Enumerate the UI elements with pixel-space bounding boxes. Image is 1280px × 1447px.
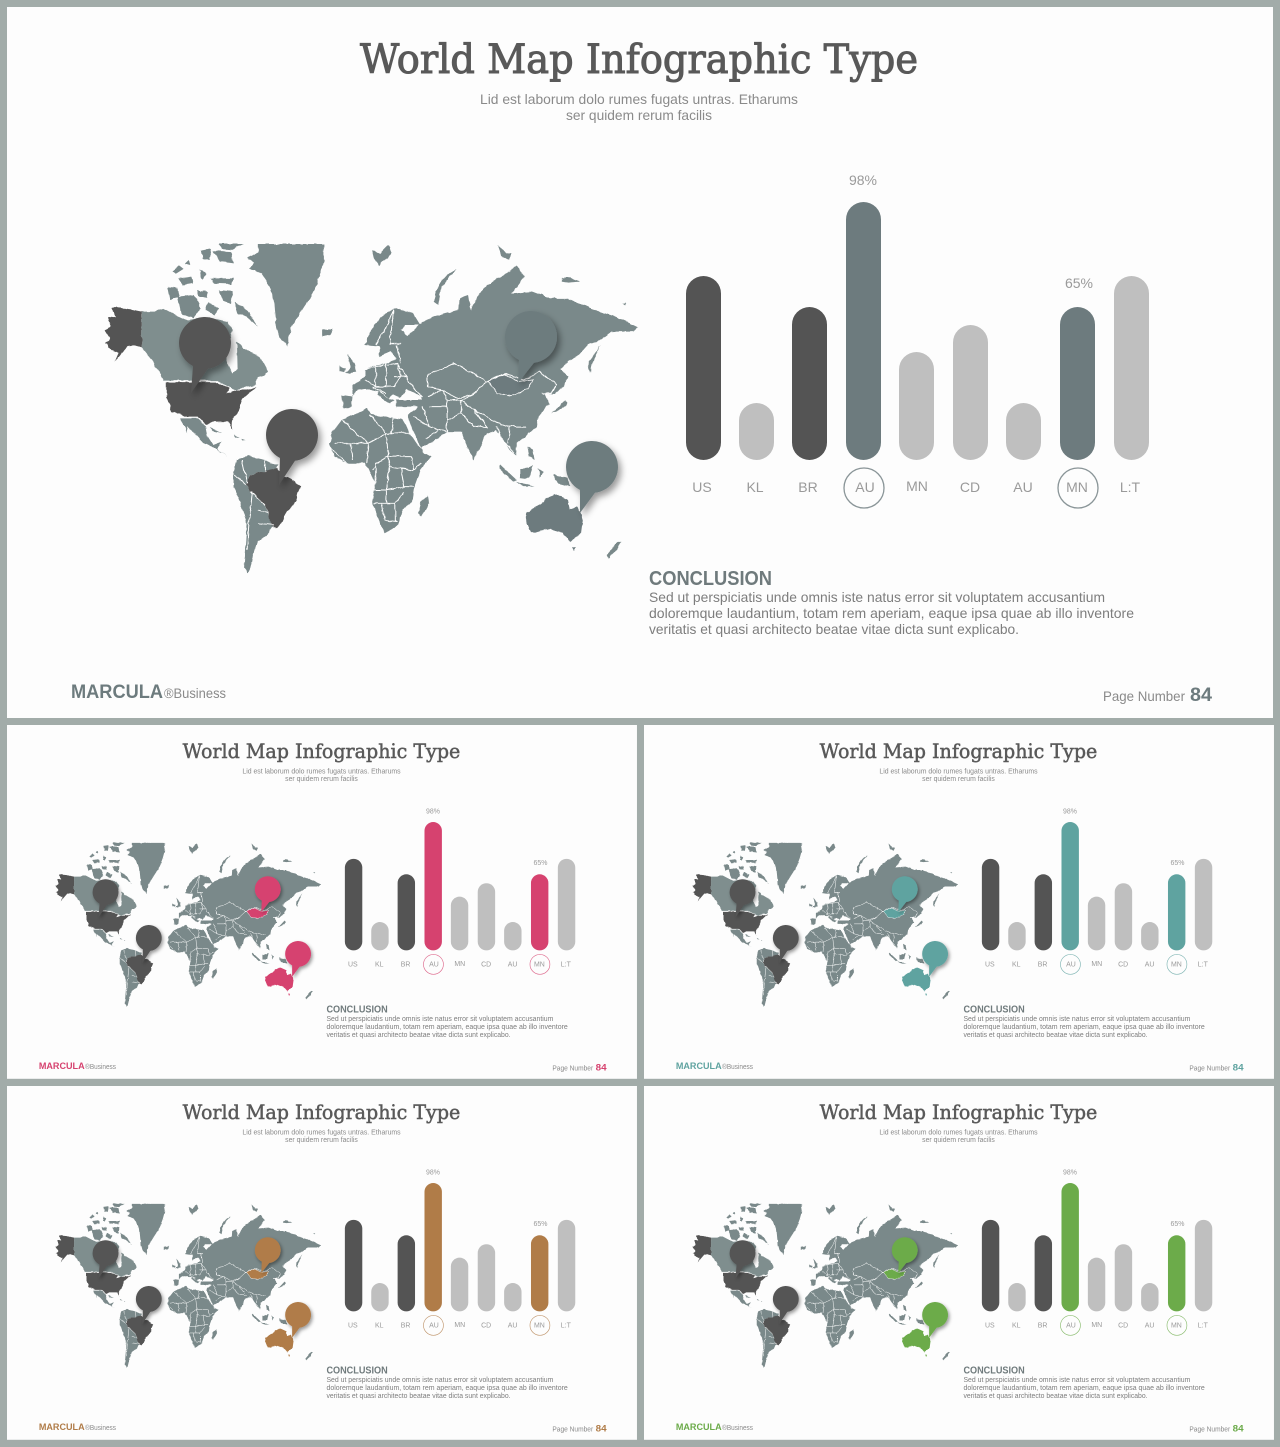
brand: MARCULA — [71, 682, 163, 703]
bar chart: BR — [401, 961, 410, 968]
bar chart: BR — [1038, 961, 1047, 968]
map pins — [93, 1237, 311, 1338]
conclusion: veritatis et quasi architecto beatae vitae dicta sunt explicabo. — [326, 1393, 511, 1400]
bar chart: AU — [508, 961, 517, 968]
brand: MARCULA — [39, 1061, 85, 1072]
bar chart: KL — [1012, 961, 1021, 968]
page number: 84 — [596, 1062, 607, 1073]
conclusion: veritatis et quasi architecto beatae vitae dicta sunt explicabo. — [649, 621, 1019, 637]
conclusion: veritatis et quasi architecto beatae vitae dicta sunt explicabo. — [963, 1393, 1148, 1400]
bar chart: L:T — [1120, 479, 1141, 495]
bar chart: US — [692, 479, 712, 495]
bar chart: CD — [481, 961, 491, 968]
map pins — [93, 876, 311, 977]
bar chart: AU — [1013, 479, 1033, 495]
subtitle: ser quidem rerum facilis — [922, 1137, 995, 1144]
bar chart: KL — [375, 961, 384, 968]
brand: ®Business — [722, 1063, 753, 1071]
bar chart: 65% — [533, 860, 547, 867]
page number — [1189, 1423, 1244, 1434]
page number: Page Number — [1103, 688, 1185, 704]
bar chart: US — [348, 961, 358, 968]
bar chart — [686, 172, 1149, 508]
subtitle — [242, 1129, 401, 1144]
conclusion — [649, 568, 1134, 637]
page number: 84 — [1233, 1062, 1244, 1073]
conclusion: CONCLUSION — [326, 1366, 388, 1377]
page number: 84 — [1190, 685, 1212, 706]
panel: green slide — [644, 1086, 1274, 1440]
bar chart: 98% — [426, 1170, 440, 1177]
bar chart: AU — [1066, 1322, 1076, 1329]
subtitle: ser quidem rerum facilis — [285, 776, 358, 783]
bar chart: BR — [798, 479, 818, 495]
bar chart: US — [348, 1322, 358, 1329]
bar chart: AU — [855, 479, 875, 495]
bar chart: AU — [429, 961, 439, 968]
bar chart: MN — [1091, 1322, 1102, 1329]
bar chart: 98% — [1063, 809, 1077, 816]
bar chart: AU — [1145, 1322, 1154, 1329]
subtitle: Lid est laborum dolo rumes fugats untras. Etharums — [242, 1129, 401, 1136]
bar chart: AU — [508, 1322, 517, 1329]
world map — [104, 244, 638, 573]
bar chart: MN — [1066, 479, 1088, 495]
bar chart: MN — [454, 1322, 465, 1329]
conclusion: Sed ut perspiciatis unde omnis iste natus error sit voluptatem accusantium — [963, 1377, 1191, 1384]
bar chart: L:T — [561, 961, 572, 968]
conclusion: veritatis et quasi architecto beatae vitae dicta sunt explicabo. — [963, 1032, 1148, 1039]
world map — [55, 843, 321, 1007]
brand — [676, 1061, 753, 1072]
page number — [552, 1062, 607, 1073]
brand: ®Business — [85, 1063, 116, 1071]
bar chart: KL — [375, 1322, 384, 1329]
bar chart: MN — [1091, 961, 1102, 968]
bar chart: CD — [960, 479, 980, 495]
page number — [1189, 1062, 1244, 1073]
bar chart: KL — [746, 479, 764, 495]
subtitle: ser quidem rerum facilis — [566, 107, 712, 123]
bar chart: L:T — [1198, 1322, 1209, 1329]
page number: Page Number — [1189, 1426, 1231, 1433]
bar chart: 65% — [1170, 1221, 1184, 1228]
conclusion: Sed ut perspiciatis unde omnis iste natus error sit voluptatem accusantium — [649, 589, 1105, 605]
subtitle: Lid est laborum dolo rumes fugats untras. Etharums — [480, 91, 798, 107]
conclusion — [326, 1366, 568, 1400]
brand — [39, 1061, 116, 1072]
brand — [39, 1422, 116, 1433]
bar chart — [345, 1170, 575, 1335]
panel: brown slide — [7, 1086, 637, 1440]
brand: ®Business — [164, 685, 226, 701]
page number: Page Number — [1189, 1065, 1231, 1072]
brand: ®Business — [85, 1424, 116, 1432]
bar chart: CD — [1118, 1322, 1128, 1329]
bar chart — [982, 809, 1212, 974]
bar chart: US — [985, 1322, 995, 1329]
subtitle: ser quidem rerum facilis — [285, 1137, 358, 1144]
conclusion — [326, 1005, 568, 1039]
brand: MARCULA — [676, 1422, 722, 1433]
conclusion: Sed ut perspiciatis unde omnis iste natus error sit voluptatem accusantium — [326, 1377, 554, 1384]
bar chart: AU — [429, 1322, 439, 1329]
bar chart: AU — [1066, 961, 1076, 968]
world map — [692, 1204, 958, 1368]
bar chart: MN — [1171, 1322, 1182, 1329]
conclusion — [963, 1366, 1205, 1400]
page number: 84 — [1233, 1423, 1244, 1434]
brand: MARCULA — [676, 1061, 722, 1072]
title: World Map Infographic Type — [820, 1101, 1097, 1124]
bar chart: MN — [534, 1322, 545, 1329]
bar chart: US — [985, 961, 995, 968]
conclusion: Sed ut perspiciatis unde omnis iste natus error sit voluptatem accusantium — [963, 1016, 1191, 1023]
world map — [692, 843, 958, 1007]
conclusion: doloremque laudantium, totam rem aperiam, eaque ipsa quae ab illo inventore — [326, 1385, 568, 1392]
bar chart: MN — [534, 961, 545, 968]
bar chart: BR — [1038, 1322, 1047, 1329]
panel: pink slide — [7, 725, 637, 1079]
title: World Map Infographic Type — [360, 37, 918, 83]
conclusion: CONCLUSION — [963, 1366, 1025, 1377]
subtitle — [480, 91, 798, 123]
page number: Page Number — [552, 1065, 594, 1072]
brand — [676, 1422, 753, 1433]
conclusion: CONCLUSION — [326, 1005, 388, 1016]
conclusion: Sed ut perspiciatis unde omnis iste natus error sit voluptatem accusantium — [326, 1016, 554, 1023]
panel: main slide — [7, 7, 1273, 718]
map pins — [730, 876, 948, 977]
subtitle: Lid est laborum dolo rumes fugats untras. Etharums — [879, 768, 1038, 775]
bar chart: 65% — [533, 1221, 547, 1228]
bar chart: L:T — [561, 1322, 572, 1329]
conclusion: doloremque laudantium, totam rem aperiam, eaque ipsa quae ab illo inventore — [963, 1385, 1205, 1392]
conclusion: CONCLUSION — [649, 568, 772, 590]
subtitle — [879, 768, 1038, 783]
page number: 84 — [596, 1423, 607, 1434]
brand: MARCULA — [39, 1422, 85, 1433]
title: World Map Infographic Type — [183, 1101, 460, 1124]
brand — [71, 682, 226, 703]
page number: Page Number — [552, 1426, 594, 1433]
bar chart: 65% — [1065, 275, 1093, 291]
page number — [1103, 685, 1212, 706]
conclusion: doloremque laudantium, totam rem aperiam, eaque ipsa quae ab illo inventore — [649, 605, 1134, 621]
map pins — [730, 1237, 948, 1338]
bar chart: MN — [454, 961, 465, 968]
bar chart — [345, 809, 575, 974]
subtitle: Lid est laborum dolo rumes fugats untras. Etharums — [879, 1129, 1038, 1136]
map pins — [179, 311, 618, 513]
conclusion: doloremque laudantium, totam rem aperiam, eaque ipsa quae ab illo inventore — [326, 1024, 568, 1031]
page number — [552, 1423, 607, 1434]
bar chart: 65% — [1170, 860, 1184, 867]
title: World Map Infographic Type — [183, 740, 460, 763]
bar chart: KL — [1012, 1322, 1021, 1329]
bar chart: MN — [906, 478, 928, 494]
bar chart: AU — [1145, 961, 1154, 968]
conclusion: doloremque laudantium, totam rem aperiam, eaque ipsa quae ab illo inventore — [963, 1024, 1205, 1031]
conclusion — [963, 1005, 1205, 1039]
subtitle — [242, 768, 401, 783]
bar chart: 98% — [1063, 1170, 1077, 1177]
title: World Map Infographic Type — [820, 740, 1097, 763]
conclusion: CONCLUSION — [963, 1005, 1025, 1016]
panel: teal slide — [644, 725, 1274, 1079]
world map — [55, 1204, 321, 1368]
bar chart: L:T — [1198, 961, 1209, 968]
subtitle — [879, 1129, 1038, 1144]
conclusion: veritatis et quasi architecto beatae vitae dicta sunt explicabo. — [326, 1032, 511, 1039]
bar chart: BR — [401, 1322, 410, 1329]
bar chart — [982, 1170, 1212, 1335]
brand: ®Business — [722, 1424, 753, 1432]
subtitle: Lid est laborum dolo rumes fugats untras. Etharums — [242, 768, 401, 775]
bar chart: CD — [481, 1322, 491, 1329]
subtitle: ser quidem rerum facilis — [922, 776, 995, 783]
bar chart: 98% — [849, 172, 877, 188]
bar chart: CD — [1118, 961, 1128, 968]
bar chart: MN — [1171, 961, 1182, 968]
bar chart: 98% — [426, 809, 440, 816]
